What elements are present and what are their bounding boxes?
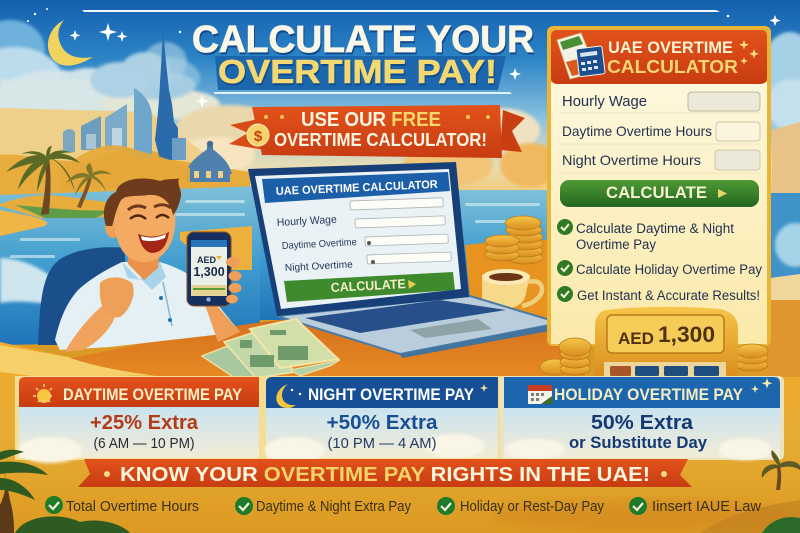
calculate button [560,180,759,207]
field: night overtime hours: Night Overtime Hours [562,152,701,168]
holiday card header: HOLIDAY OVERTIME PAY [554,385,744,404]
daytime rate: +25% Extra [90,412,199,434]
sea [180,190,550,320]
icon: coffee cup [482,269,542,309]
stars [27,8,780,107]
dunes in front of skyline [60,145,190,190]
night card header [266,377,498,408]
daytime hours: (6 AM — 10 PM) [94,435,195,452]
icon: dollar coin: $ [254,128,263,145]
banner: use our free overtime calculator [229,105,525,158]
shirt [55,262,240,350]
fingers [226,257,242,304]
title line 1: CALCULATE YOUR [192,19,534,61]
check: daytime and night pay: Overtime Pay [576,237,656,252]
night card header: NIGHT OVERTIME PAY [308,385,475,404]
check: daytime and night extra pay: Daytime & Night Extra Pay [256,499,412,515]
calculator panel title: UAE OVERTIME [608,39,733,57]
night hours: (10 PM — 4 AM) [328,435,437,452]
field: hourly wage [562,92,760,111]
top white line [82,10,720,12]
calculate button: CALCULATE [606,184,707,202]
panel: UAE overtime calculator [547,26,771,346]
title line 2: OVERTIME PAY! [218,53,497,90]
holiday rate: 50% Extra [591,412,694,434]
check: instant results: Get Instant & Accurate Results! [577,288,760,303]
icon: crescent moon [48,20,93,66]
calculator display [607,315,724,353]
sand [0,108,260,195]
holiday card header [504,377,780,408]
lower sand [0,342,800,533]
icon: moon [276,384,296,408]
calculator display: 1,300 [658,322,715,347]
night rate: +50% Extra [326,412,438,434]
phone hand [205,300,240,342]
screen form fields: Hourly Wage [277,214,337,229]
banner star ornaments [264,115,490,119]
icon: corner palm left [0,450,130,533]
laptop [248,162,560,358]
field: daytime overtime hours [562,122,760,141]
phone [187,232,242,342]
check: daytime and night pay [557,219,734,252]
laptop base [277,296,560,358]
icon: palm trees [6,146,112,215]
person [55,178,240,352]
icon: mosque [185,141,232,182]
screen form fields [277,198,451,274]
foam on left shore [0,258,60,305]
field: night overtime hours [562,150,760,170]
banner line 1: USE OUR FREE [301,109,441,131]
neck [128,250,160,280]
calculator panel header [551,30,767,84]
panel: night overtime pay [259,376,505,463]
field: daytime overtime hours: Daytime Overtime Hours [562,123,712,139]
coins on tray [465,216,548,320]
icon: calendar [528,385,553,404]
phone amount: AED [197,255,217,265]
forearm and fist [65,306,115,352]
laptop screen frame [248,162,469,316]
check: total overtime hours: Total Overtime Hours [66,499,199,515]
check: holiday or rest-day pay: Holiday or Rest-Day Pay [460,499,605,515]
calculator display: AED [618,329,654,348]
banknotes [202,319,340,378]
ear [105,216,121,238]
skyline with tower [63,28,186,160]
feature checklist [557,219,762,303]
calculator keys [604,362,726,378]
panel: daytime overtime pay [15,376,262,463]
coins beside calculator [540,338,768,375]
chair [38,247,125,345]
checklist row [45,496,762,515]
holiday substitute day: or Substitute Day [569,434,708,452]
ribbon: know your rights: KNOW YOUR OVERTIME PAY RIGHTS IN THE UAE! [120,464,650,486]
screen heading: UAE OVERTIME CALCULATOR [276,179,439,198]
icon: calculator sheets [557,33,605,79]
calculator device [595,307,738,378]
banner line 2: OVERTIME CALCULATOR! [274,130,487,150]
icon: corner palm right [762,450,800,533]
calculator panel header: CALCULATOR [607,57,738,77]
panel: holiday overtime pay [500,376,784,460]
check: holiday pay: Calculate Holiday Overtime Pay [576,262,762,277]
face [114,192,175,262]
phone: 1,300 [193,265,225,279]
screen calculate button: CALCULATE [330,276,406,295]
phone screen [191,240,227,296]
screen form fields: Night Overtime [285,259,354,274]
hair [104,178,181,226]
laptop screen [255,169,461,309]
eyes and smile [130,216,146,219]
title [192,19,534,94]
ribbon: know your rights [78,459,692,487]
daytime card header: DAYTIME OVERTIME PAY [63,385,243,404]
icon: dollar coin [247,124,269,146]
table [70,300,585,378]
screen heading [262,172,450,203]
daytime card header [19,377,259,409]
field: hourly wage: Hourly Wage [562,94,647,110]
screen calculate button [284,272,455,302]
check: insert UAE law: Iinsert IAUE Law [652,499,762,515]
check: daytime and night pay: Calculate Daytime & Night [576,221,734,236]
screen form fields: Daytime Overtime [282,237,357,252]
icon: sun [33,384,58,409]
